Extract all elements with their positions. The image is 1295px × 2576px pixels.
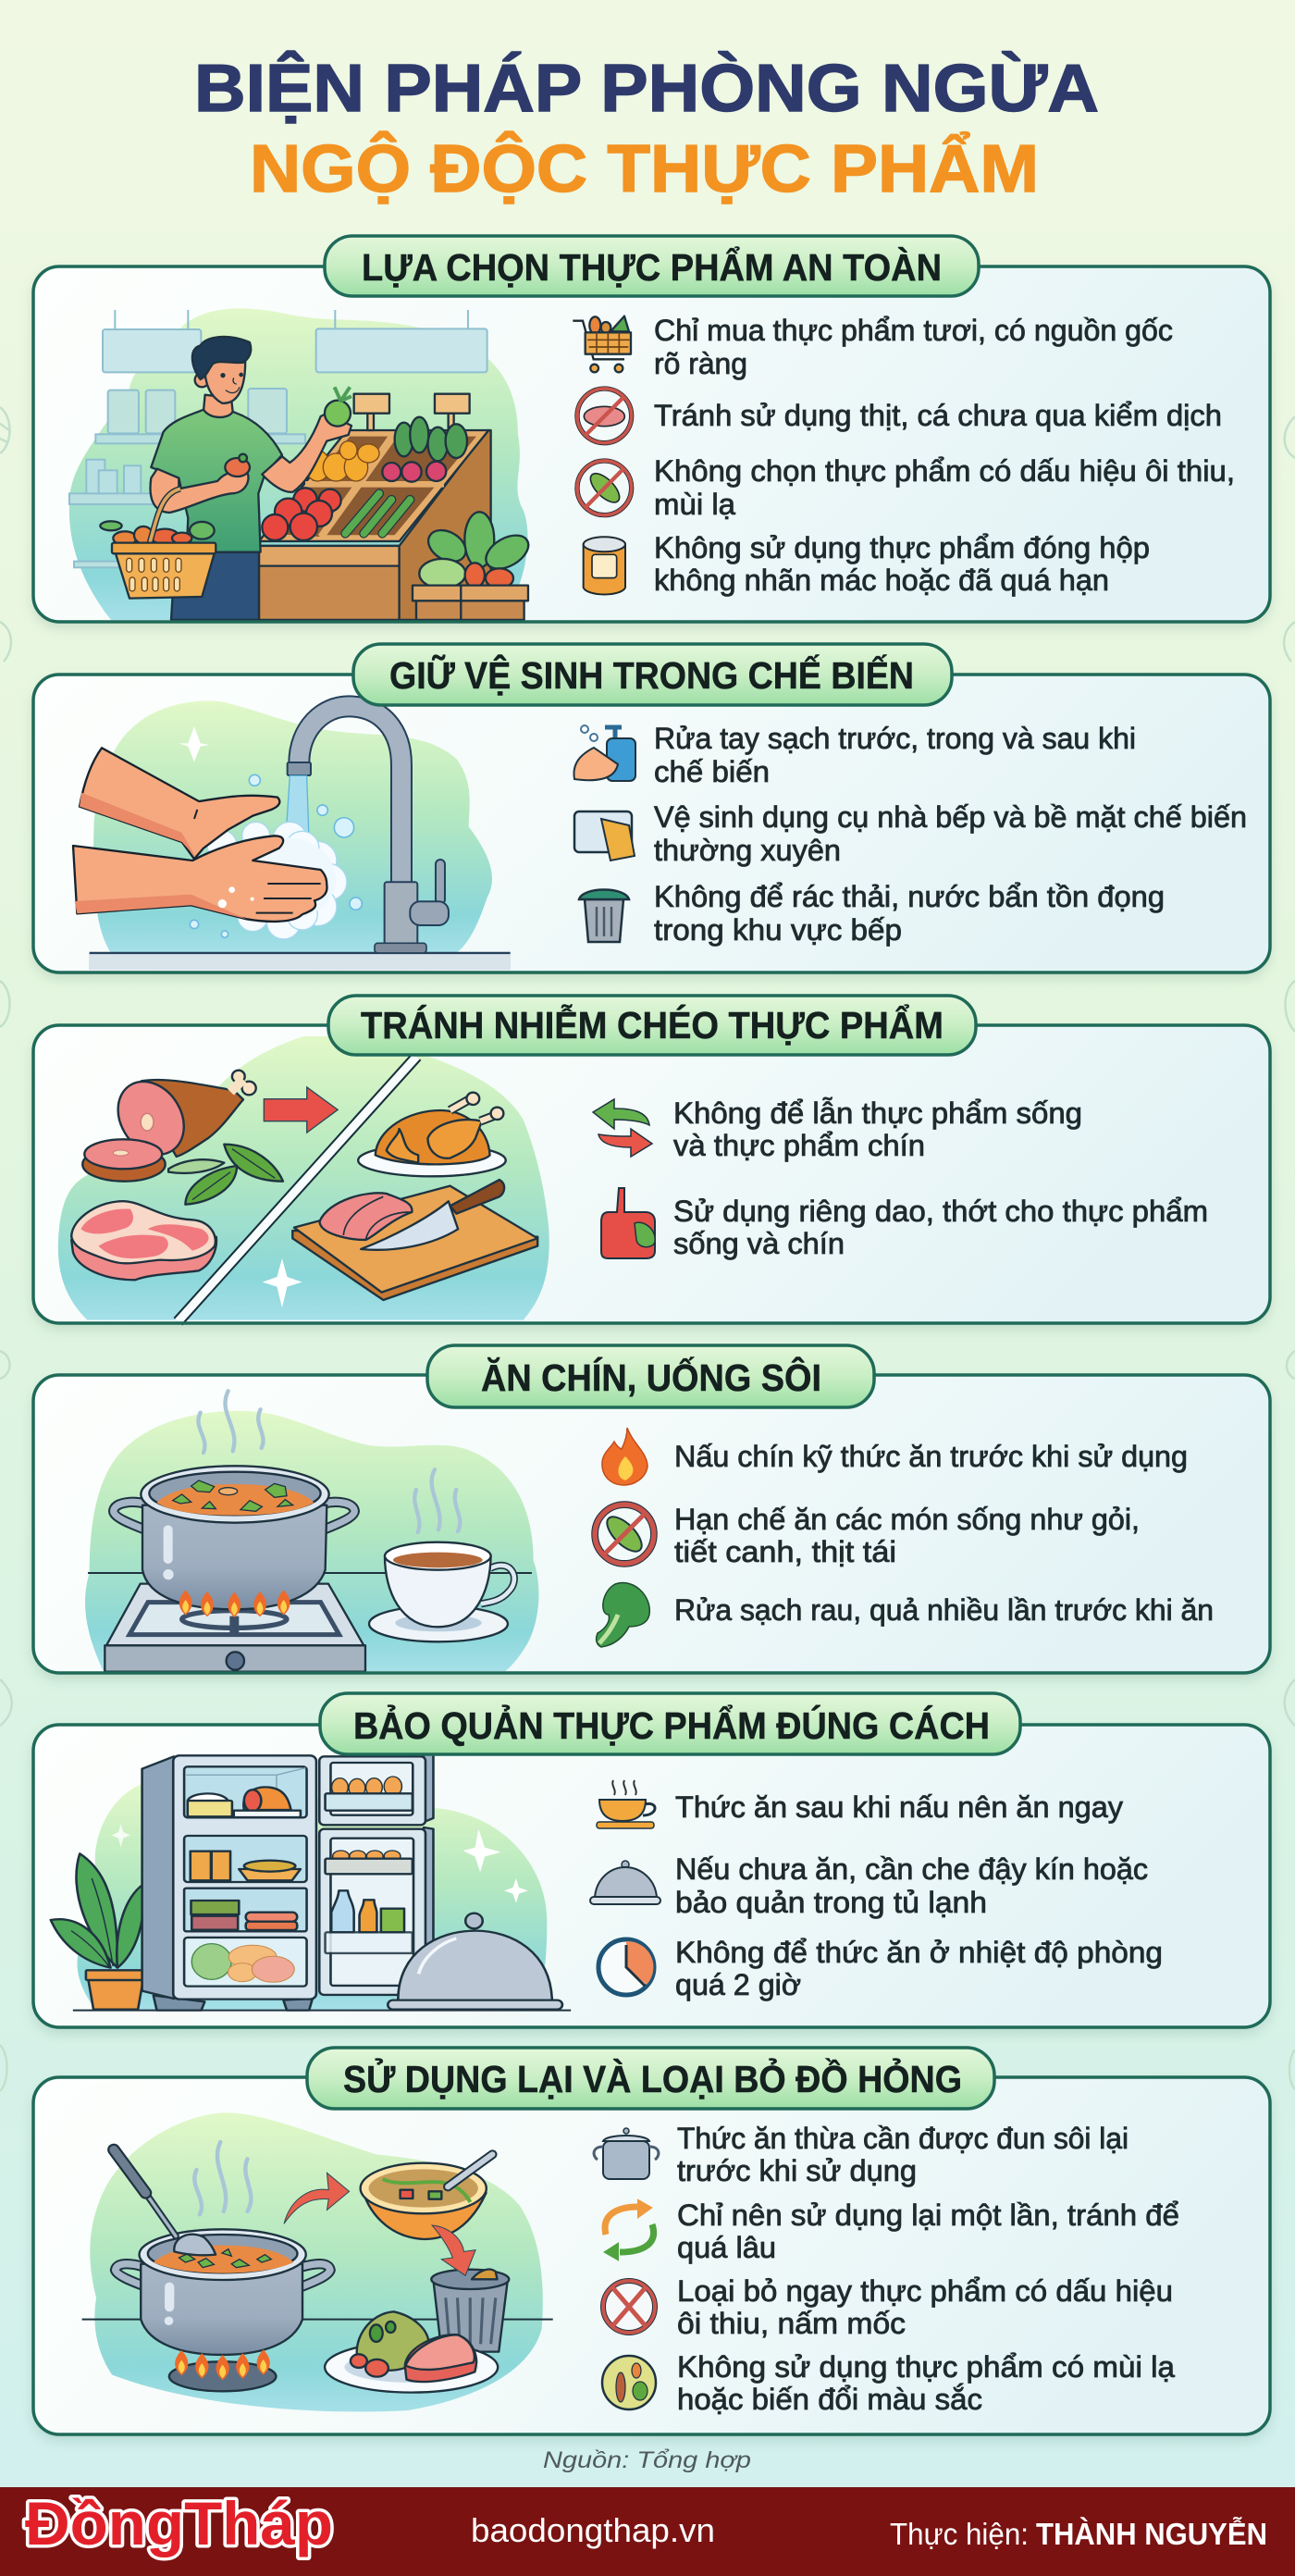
arrows (284, 2173, 350, 2223)
list: panel 6 (677, 2122, 1179, 2416)
footer bar (0, 2487, 1295, 2576)
heading pill: SỬ DỤNG LẠI VÀ LOẠI BỎ ĐỒ HỎNG (343, 2058, 962, 2100)
list: panel 1: Tránh sử dụng thịt, cá chưa qua kiểm dịch (654, 399, 1222, 432)
roast chicken (358, 1145, 506, 1176)
list: panel 6: Thức ăn thừa cần được đun sôi lại (677, 2122, 1128, 2155)
illustration: washing hands under faucet (73, 701, 511, 970)
panel: Bảo quản thực phẩm đúng cách (33, 1693, 1270, 2027)
panel: Ăn chín, uống sôi (33, 1345, 1270, 1673)
pears (305, 441, 379, 481)
list: panel 5: quá 2 giờ (675, 1968, 801, 2001)
basket (100, 521, 215, 545)
list: panel 6: Không sử dụng thực phẩm có mùi lạ (677, 2350, 1175, 2384)
list: panel 1: rõ ràng (654, 347, 747, 380)
card border (33, 1375, 1270, 1673)
list: panel 5 (675, 1790, 1163, 2001)
knife (361, 1201, 458, 1250)
cloche (398, 1931, 552, 2000)
list: panel 1: Không sử dụng thực phẩm đóng hộp (654, 531, 1150, 564)
list: panel 6: hoặc biến đổi màu sắc (677, 2383, 982, 2416)
foam (207, 822, 347, 939)
icon: hand wash soap (574, 725, 635, 781)
list: panel 3: và thực phẩm chín (673, 1129, 925, 1162)
man (171, 552, 259, 620)
hands (80, 748, 279, 859)
list: panel 4 (674, 1440, 1214, 1627)
bay leaves (168, 1145, 283, 1205)
heading pill (353, 644, 952, 705)
author: THÀNH NGUYỄN (1036, 2517, 1267, 2551)
tomatoes (262, 488, 341, 540)
fridge doors (422, 1752, 433, 1823)
title: NGỘ ĐỘC THỰC PHẨM (250, 131, 1039, 206)
source note: Nguồn: Tổng hợp (543, 2447, 751, 2473)
illustration: raw and cooked food separated (58, 1036, 549, 1321)
list: panel 4: tiết canh, thịt tái (674, 1535, 896, 1568)
icon: spoiled food (602, 2356, 656, 2409)
icon: discard X (603, 2281, 655, 2333)
panel: Lựa chọn thực phẩm an toàn (33, 236, 1270, 622)
radishes and leaves (395, 417, 467, 461)
list: panel 2: Vệ sinh dụng cụ nhà bếp và bề mặt chế biến (654, 800, 1247, 834)
list: panel 1: không nhãn mác hoặc đã quá hạn (654, 564, 1109, 597)
icon: cleaning board and sponge (574, 811, 635, 861)
heading pill (307, 2048, 994, 2109)
plate (325, 2342, 498, 2393)
list: panel 6: ôi thiu, nấm mốc (677, 2307, 906, 2340)
title: BIỆN PHÁP PHÒNG NGỪA (194, 51, 1099, 126)
heading pill (320, 1693, 1020, 1754)
icon: cutting board (601, 1188, 655, 1258)
panel: Tránh nhiễm chéo thực phẩm (33, 996, 1270, 1323)
list: panel 2: thường xuyên (654, 834, 841, 867)
pot (114, 1502, 150, 1531)
illustration: man shopping at produce stand (69, 308, 534, 620)
icon: swap arrows (593, 1099, 652, 1157)
fridge body (154, 1996, 313, 2011)
ladle (114, 2149, 176, 2236)
icon: pot (594, 2128, 659, 2179)
list: panel 1: Chỉ mua thực phẩm tươi, có nguồn gốc (654, 314, 1173, 347)
website: baodongthap.vn (471, 2511, 715, 2549)
icon: cloche (590, 1861, 660, 1904)
list: panel 5: bảo quản trong tủ lạnh (675, 1886, 987, 1919)
raw steak (71, 1237, 216, 1280)
card border (33, 266, 1270, 622)
heading pill (325, 236, 979, 296)
list: panel 2: Rửa tay sạch trước, trong và sau khi (654, 722, 1136, 755)
steam (198, 1391, 460, 1532)
title (194, 51, 1099, 206)
list: panel 5: Thức ăn sau khi nấu nên ăn ngay (675, 1790, 1123, 1824)
list: panel 1: Không chọn thực phẩm có dấu hiệu ôi thiu, (654, 454, 1235, 488)
ham (135, 1080, 243, 1157)
cucumbers (345, 493, 410, 534)
pot (116, 2264, 151, 2288)
arrow (264, 1087, 338, 1133)
heading pill (328, 996, 976, 1055)
heading pill: LỰA CHỌN THỰC PHẨM AN TOÀN (362, 245, 942, 289)
list: panel 4: Nấu chín kỹ thức ăn trước khi sử dụng (674, 1440, 1188, 1473)
heading pill: BẢO QUẢN THỰC PHẨM ĐÚNG CÁCH (353, 1703, 990, 1747)
icon: no spoiled food (577, 461, 632, 515)
heading pill: TRÁNH NHIỄM CHÉO THỰC PHẨM (361, 1003, 944, 1046)
list: panel 6: trước khi sử dụng (677, 2154, 917, 2187)
decorative edge food outlines (0, 407, 1295, 2091)
list: panel 1 (654, 314, 1235, 597)
icon: can (584, 537, 625, 594)
illustration: pot on stove and tea cup (85, 1391, 538, 1672)
list: panel 2: trong khu vực bếp (654, 913, 902, 947)
list: panel 5: Không để thức ăn ở nhiệt độ phòng (675, 1936, 1163, 1969)
list: panel 3: Sử dụng riêng dao, thớt cho thực phẩm (673, 1195, 1208, 1228)
card border (33, 2077, 1270, 2434)
list: panel 3 (673, 1096, 1208, 1260)
flames (179, 1590, 192, 1616)
list: panel 1: mùi lạ (654, 488, 735, 521)
faucet (299, 706, 401, 886)
panel: Sử dụng lại và loại bỏ đồ hỏng (33, 2048, 1270, 2434)
icon: flame (602, 1428, 648, 1485)
list: panel 5: Nếu chưa ăn, cần che đậy kín hoặc (675, 1852, 1148, 1886)
heading pill (427, 1345, 874, 1407)
plant (51, 1853, 143, 1968)
icon: recycle arrows (605, 2200, 654, 2260)
icon: clock (598, 1939, 654, 1995)
illustration: open fridge, plant and cloche (51, 1752, 571, 2011)
fridge food (188, 1801, 232, 1816)
bowl (362, 2186, 486, 2239)
icon: vegetable (597, 1583, 649, 1647)
heading pill: GIỮ VỆ SINH TRONG CHẾ BIẾN (389, 654, 914, 697)
illustration: reheating soup and discarding food (82, 2112, 553, 2411)
list: panel 2: Không để rác thải, nước bẩn tồn đọng (654, 880, 1165, 913)
list: panel 4: Rửa sạch rau, quả nhiều lần trước khi ăn (674, 1593, 1214, 1627)
bubbles (190, 774, 362, 937)
steam (194, 2142, 251, 2214)
card border (33, 675, 1270, 972)
list: panel 3: sống và chín (673, 1227, 845, 1260)
burner (169, 2361, 276, 2391)
icon: no raw meat (577, 389, 632, 443)
credit: Thực hiện: (890, 2517, 1029, 2551)
list: panel 4: Hạn chế ăn các món sống như gỏi, (674, 1503, 1140, 1536)
sparkle (263, 1258, 302, 1307)
list: panel 6: Chỉ nên sử dụng lại một lần, tránh để (677, 2198, 1179, 2232)
icon: no raw food (595, 1505, 654, 1564)
trash bin (434, 2283, 508, 2352)
logo: ĐồngTháp (25, 2489, 333, 2557)
card border (33, 1025, 1270, 1323)
list: panel 6: quá lâu (677, 2231, 776, 2264)
stove (106, 1584, 364, 1645)
heading pill: ĂN CHÍN, UỐNG SÔI (481, 1356, 821, 1399)
cutting board (292, 1231, 537, 1300)
list: panel 6: Loại bỏ ngay thực phẩm có dấu hiệu (677, 2274, 1173, 2308)
card border (33, 1725, 1270, 2027)
list: panel 2: chế biến (654, 755, 770, 788)
divider line (178, 1057, 416, 1321)
icon: trash bin (579, 890, 629, 942)
price tags (354, 394, 470, 430)
icons: panel 1 (573, 316, 632, 594)
panel: Giữ vệ sinh trong chế biến (33, 644, 1270, 972)
list: panel 2 (654, 722, 1247, 947)
icon: hot cup (597, 1780, 655, 1828)
list: panel 3: Không để lẫn thực phẩm sống (673, 1096, 1082, 1130)
cup (369, 1606, 508, 1641)
crate with greens (419, 512, 534, 588)
